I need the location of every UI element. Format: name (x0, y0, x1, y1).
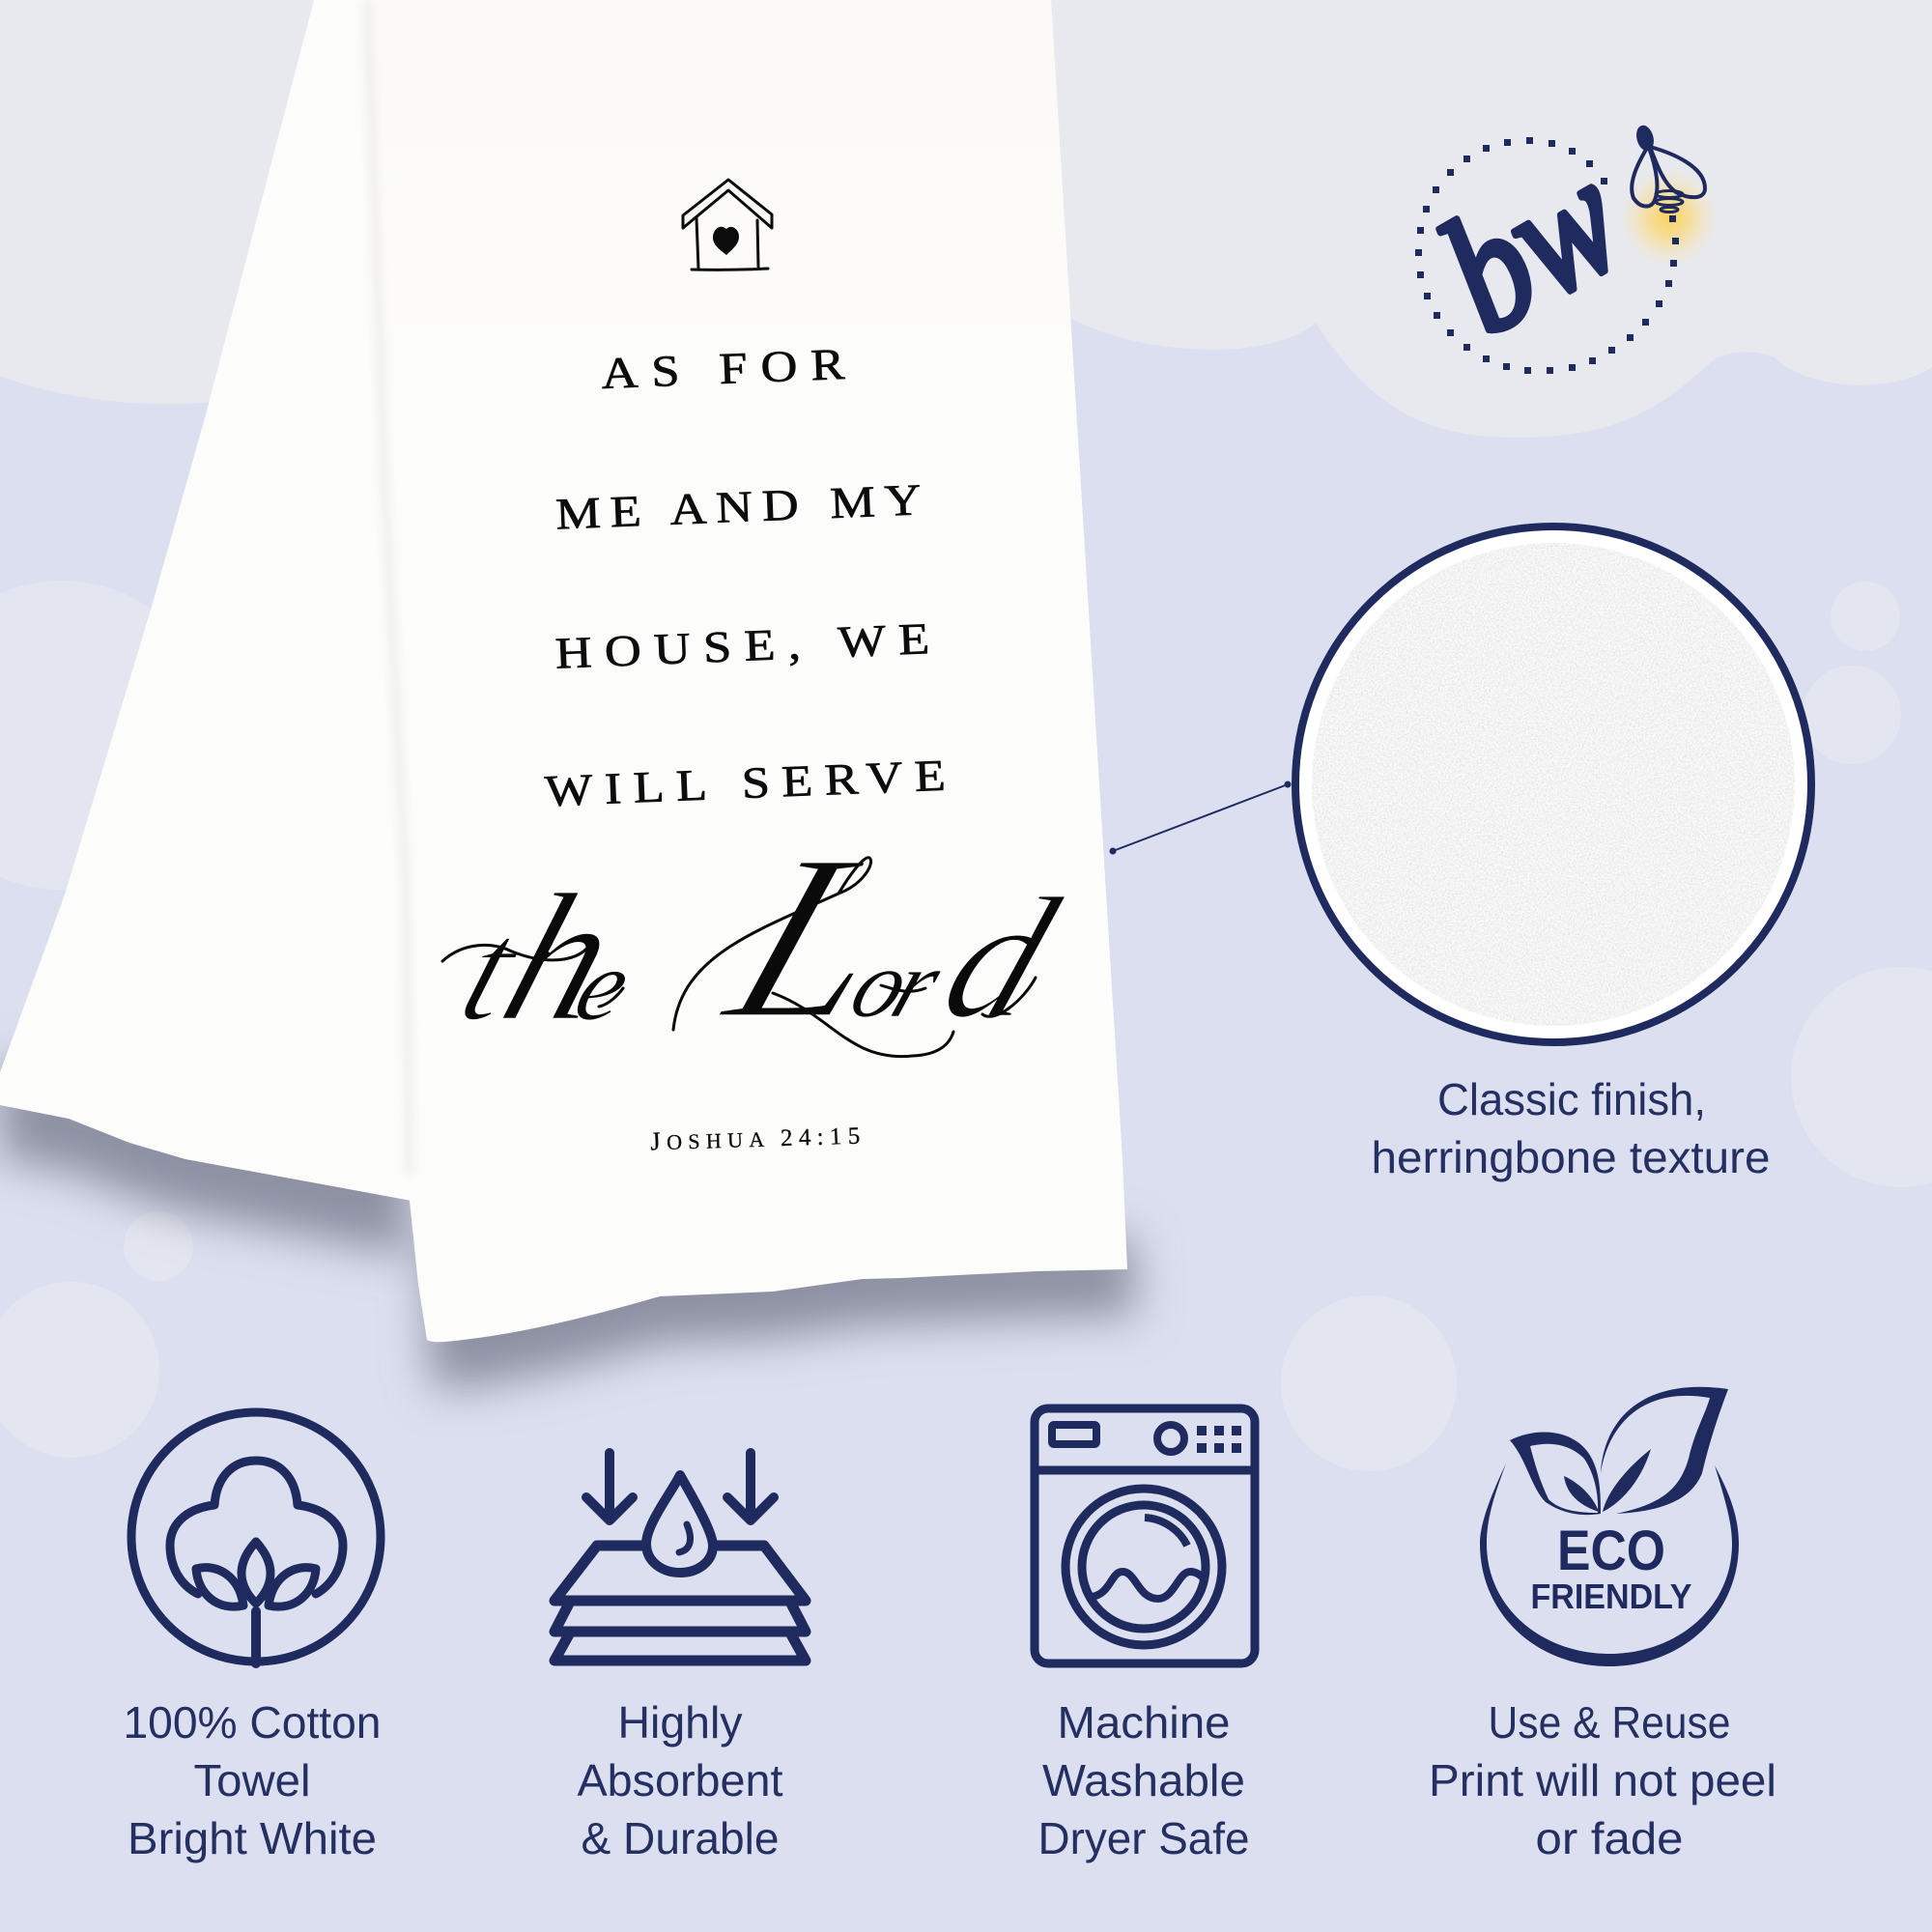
swatch caption (1372, 1074, 1770, 1182)
script phrase: the Lord (440, 806, 1099, 1067)
towel verse text (544, 339, 947, 816)
badge crescent (1480, 1463, 1739, 1666)
verse citation: JOSHUA 24:15 (650, 1121, 861, 1155)
fabric swatch (1312, 543, 1795, 1026)
dotted logo ring (1415, 137, 1679, 374)
line: HOUSE, WE: HOUSE, WE (554, 613, 930, 678)
logo (1411, 123, 1719, 374)
script word: Lord: o (838, 931, 924, 1037)
script word: the: h (481, 856, 639, 1060)
caption line 2: herringbone texture (1372, 1132, 1770, 1182)
icon: washing machine (1035, 1408, 1255, 1663)
towel (0, 0, 1127, 1342)
decorative flourishes (442, 858, 1036, 1057)
inner leaf veins (1564, 1449, 1651, 1512)
absorbent line 2: Absorbent (578, 1755, 783, 1805)
badge text ECO: ECO (1557, 1520, 1665, 1582)
reuse line 2: Print will not peel (1429, 1755, 1776, 1805)
label: reuse (1429, 1697, 1776, 1863)
label: washable (1037, 1697, 1250, 1863)
washable line 1: Machine (1057, 1697, 1231, 1747)
right leaf (1601, 1387, 1728, 1514)
line: AS FOR: AS FOR (600, 339, 845, 398)
towel front panel (365, 0, 1127, 1342)
texture ring (1295, 526, 1811, 1042)
icon: house with heart (683, 180, 772, 270)
badge text FRIENDLY: FRIENDLY (1530, 1577, 1692, 1616)
label: absorbent (578, 1697, 783, 1863)
caption line 1: Classic finish, (1437, 1074, 1706, 1124)
panel: fabric texture callout (1110, 526, 1811, 1182)
fold crease shadow (367, 0, 410, 1174)
icon: firefly (1632, 126, 1705, 213)
line: ME AND MY: ME AND MY (554, 474, 922, 539)
absorbent line 1: Highly (618, 1697, 742, 1747)
script word: the: e (562, 929, 644, 1041)
connector line (1110, 781, 1291, 854)
top cloud band (0, 0, 1932, 438)
icon: eco friendly badge (1480, 1387, 1739, 1666)
left leaf (1510, 1433, 1601, 1515)
cotton line 2: Towel (193, 1755, 311, 1805)
reuse line 1: Use & Reuse (1488, 1697, 1731, 1747)
towel drop shadow (0, 1063, 1136, 1389)
label: cotton (124, 1697, 381, 1863)
reuse line 3: or fade (1536, 1813, 1683, 1863)
cotton line 1: 100% Cotton (124, 1697, 381, 1747)
line: WILL SERVE: WILL SERVE (544, 751, 947, 816)
logo lettering: bw (1411, 123, 1651, 369)
icon: absorbent layers with drop (554, 1453, 806, 1661)
script word: the: t (443, 891, 539, 1051)
background bubbles (0, 581, 1932, 1471)
firefly glow (1619, 167, 1719, 268)
towel back fold (0, 0, 412, 1201)
washable line 2: Washable (1042, 1755, 1245, 1805)
script word: Lord: r (879, 931, 956, 1037)
script word: Lord: L (698, 806, 928, 1067)
script word: Lord: d (922, 862, 1079, 1055)
cotton line 3: Bright White (128, 1813, 377, 1863)
absorbent line 3: & Durable (582, 1813, 779, 1863)
washable line 3: Dryer Safe (1037, 1813, 1250, 1863)
icon: cotton (131, 1412, 381, 1663)
